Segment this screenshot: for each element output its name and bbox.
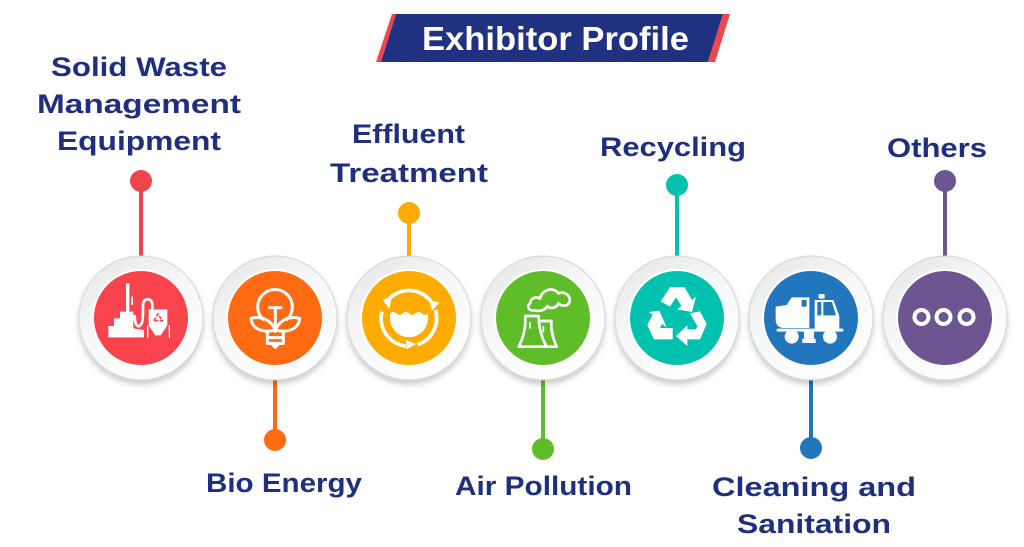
label: Solid Waste Management Equipment: [37, 52, 241, 156]
label: Solid Waste Management Equipment: Solid Waste: [51, 52, 227, 82]
badge: teal: [615, 256, 739, 380]
label: Cleaning and Sanitation: Sanitation: [737, 509, 891, 539]
badge: red: [79, 256, 203, 380]
icon: recycling arrows: [647, 287, 707, 346]
item: Cleaning and Sanitation: [712, 256, 916, 539]
badge: green: [481, 256, 605, 380]
label: Cleaning and Sanitation: Cleaning and: [712, 472, 916, 502]
connector: blue: [800, 379, 822, 459]
icon: cooling tower and cloud: [519, 290, 570, 347]
label: Air Pollution: Air Pollution: [455, 471, 632, 501]
icon: three dots: [914, 310, 974, 324]
label: Bio Energy: Bio Energy: [206, 468, 362, 498]
label: Others: Others: [887, 133, 987, 163]
badge: blue: [749, 256, 873, 380]
title banner: Exhibitor Profile: [422, 20, 689, 57]
connector: green: [532, 379, 554, 460]
item: Bio Energy: [206, 256, 362, 498]
badge: purple: [883, 256, 1007, 380]
icon: water cycle: [381, 290, 439, 349]
connector: amber: [398, 202, 420, 257]
icon: waste plant: [108, 283, 169, 338]
label: Effluent Treatment: Treatment: [330, 158, 488, 188]
badge: amber: [347, 256, 471, 380]
label: Solid Waste Management Equipment: Management: [37, 89, 241, 119]
label: Recycling: Recycling: [600, 132, 746, 162]
connector: teal: [666, 174, 688, 257]
connector: orange: [264, 379, 286, 451]
item: Solid Waste Management Equipment: [37, 52, 241, 380]
badge: orange: [213, 256, 337, 380]
title banner: [376, 14, 730, 62]
connector: red: [130, 170, 152, 257]
label: Effluent Treatment: [330, 119, 488, 188]
item: Effluent Treatment: [330, 119, 488, 380]
item: Recycling: [600, 132, 746, 380]
label: Solid Waste Management Equipment: Equipment: [57, 126, 221, 156]
label: Cleaning and Sanitation: [712, 472, 916, 539]
icon: street sweeper truck: [776, 294, 843, 344]
item: Others: [883, 133, 1007, 380]
connector: purple: [934, 170, 956, 257]
icon: bulb with leaves: [251, 289, 300, 347]
item: Air Pollution: [455, 256, 632, 501]
label: Effluent Treatment: Effluent: [352, 119, 465, 149]
